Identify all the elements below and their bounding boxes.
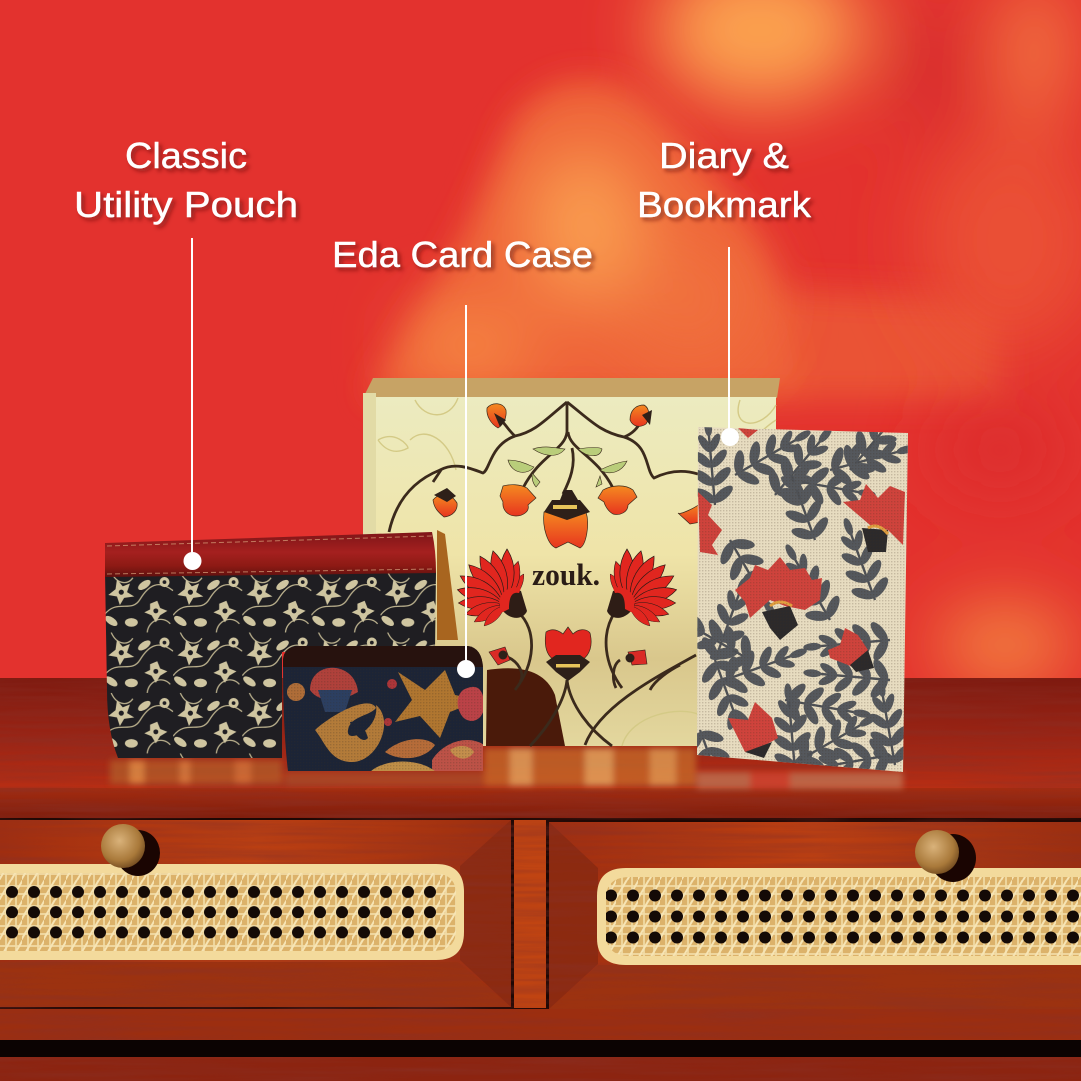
label text: classic utility pouch: Utility Pouch bbox=[74, 184, 298, 225]
table top bbox=[0, 678, 1081, 790]
card leather band bbox=[283, 646, 483, 667]
leader line: diary bbox=[721, 247, 739, 446]
cabinet body bbox=[0, 818, 1081, 1081]
label text: eda card case: Eda Card Case bbox=[332, 234, 593, 275]
box side flap bbox=[363, 393, 376, 540]
diary red flowers bbox=[698, 428, 905, 752]
leader line: card case bbox=[457, 305, 475, 678]
classic utility pouch bbox=[105, 532, 436, 758]
cane panel left bbox=[0, 864, 464, 960]
pouch fabric bbox=[105, 572, 436, 758]
label: eda card case bbox=[332, 234, 593, 678]
centre post bbox=[514, 820, 546, 1008]
label text: diary and bookmark: Bookmark bbox=[637, 184, 812, 225]
diary fabric texture bbox=[697, 427, 908, 772]
label: diary and bookmark bbox=[637, 135, 812, 446]
label text: diary and bookmark bbox=[637, 135, 812, 225]
table front edge bbox=[0, 788, 1081, 820]
left drawer wood bbox=[0, 820, 511, 1007]
leader line: pouch bbox=[184, 238, 202, 570]
knob left bbox=[101, 824, 160, 876]
box floral artwork bbox=[389, 402, 701, 746]
box logo: zouk. bbox=[532, 557, 600, 592]
diary leaf sprigs bbox=[697, 427, 908, 770]
small red buds bbox=[489, 647, 647, 665]
lower red tulip bbox=[545, 627, 591, 681]
cane panel right bbox=[597, 868, 1081, 965]
knob right bbox=[915, 830, 976, 882]
pale line florals bbox=[378, 398, 776, 746]
left red chrysanthemum bbox=[456, 549, 528, 629]
right drawer wood bbox=[549, 822, 1081, 1009]
wood grain overlay bbox=[0, 678, 1081, 1081]
right red chrysanthemum bbox=[606, 549, 678, 629]
centre tulip bbox=[544, 500, 590, 548]
shadow on box bbox=[486, 668, 565, 746]
gift box bbox=[363, 378, 780, 746]
pouch leather band bbox=[105, 532, 436, 577]
cabinet black recess bbox=[0, 1040, 1081, 1057]
orange buds bbox=[433, 404, 701, 524]
box front bbox=[376, 397, 776, 746]
diary and bookmark bbox=[697, 427, 908, 772]
table reflections bbox=[110, 748, 903, 789]
leaves bbox=[508, 447, 627, 487]
label text: classic utility pouch bbox=[74, 135, 298, 225]
label: classic utility pouch bbox=[74, 135, 298, 570]
cabinet lower rail bbox=[0, 1009, 1081, 1081]
label text: diary and bookmark: Diary & bbox=[659, 135, 789, 176]
eda card case bbox=[280, 644, 486, 774]
box lid bbox=[363, 378, 780, 398]
label text: classic utility pouch: Classic bbox=[125, 135, 247, 176]
background: red wall with orange light bbox=[0, 0, 1081, 690]
